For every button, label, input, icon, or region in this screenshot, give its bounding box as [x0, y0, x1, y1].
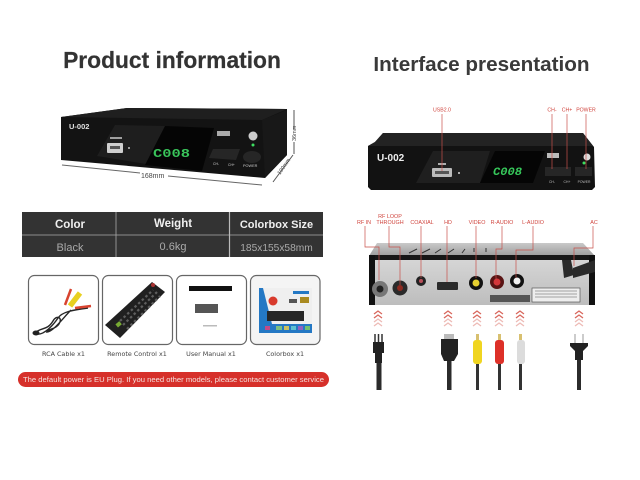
table headers: [55, 218, 313, 231]
connector: HDMI cable: [441, 334, 458, 390]
callout labels: THROUGH: [376, 220, 404, 226]
callout labels: CH-: [547, 108, 557, 114]
front panel photo with callouts: [368, 108, 596, 190]
accessory: colorbox: [250, 276, 320, 344]
front panel photo with callouts: CH+: [564, 180, 570, 184]
callout labels: RF IN: [357, 220, 371, 226]
front panel photo with callouts: CH-: [549, 180, 555, 184]
accessory: remote control: [102, 276, 172, 344]
title: product information: Product information: [63, 47, 281, 73]
accessory labels: [42, 350, 304, 358]
table headers: Color: [55, 219, 86, 231]
callout lines: [442, 114, 586, 171]
product photo: receiver with dimensions: 100mm: [277, 157, 292, 176]
table values: Black: [57, 242, 84, 254]
front panel photo with callouts: POWER: [578, 180, 591, 184]
title: interface presentation: Interface presentation: [373, 53, 590, 76]
callout labels: VIDEO: [469, 220, 485, 226]
product photo: receiver with dimensions: C008: [153, 147, 190, 161]
connector: white RCA: [517, 334, 525, 390]
notice pill: [18, 372, 329, 387]
callout labels: COAXIAL: [410, 220, 434, 226]
table values: [57, 241, 313, 254]
product photo: receiver with dimensions: CH-: [213, 162, 219, 166]
rear panel photo with callouts: [357, 214, 598, 305]
product photo: receiver with dimensions: 168mm: [141, 173, 165, 180]
connector: yellow RCA: [473, 334, 482, 390]
callout labels: HD: [444, 220, 452, 226]
accessory: RCA cable: [28, 276, 98, 344]
icons: upward chevrons: [374, 311, 583, 326]
connector: red RCA: [495, 334, 504, 390]
accessory: user manual: [176, 276, 246, 344]
callout labels: [433, 108, 596, 114]
accessory labels: User Manual x1: [186, 350, 236, 358]
callout labels: [357, 214, 598, 226]
product photo: receiver with dimensions: [61, 108, 298, 185]
product photo: receiver with dimensions: CH+: [228, 163, 235, 167]
table headers: Weight: [154, 218, 192, 230]
callout labels: POWER: [576, 108, 596, 114]
notice pill: The default power is EU Plug. If you need other models, please contact customer service: [23, 375, 324, 384]
callout labels: USB2.0: [433, 108, 451, 114]
accessory labels: Remote Control x1: [107, 350, 167, 358]
callout labels: L-AUDIO: [522, 220, 544, 226]
table values: 185x155x58mm: [240, 243, 313, 254]
table headers: Colorbox Size: [240, 219, 313, 231]
callout labels: R-AUDIO: [491, 220, 513, 226]
callout labels: RF LOOP: [378, 214, 402, 220]
front panel photo with callouts: C008: [493, 167, 522, 179]
front panel photo with callouts: U-002: [377, 153, 405, 164]
callout labels: AC: [590, 220, 598, 226]
connector: S-video cable: [373, 334, 384, 390]
accessory labels: RCA Cable x1: [42, 350, 85, 358]
product photo: receiver with dimensions: 36mm: [292, 125, 298, 141]
product photo: receiver with dimensions: POWER: [243, 164, 258, 168]
connector: EU power plug: [570, 334, 588, 390]
callout lines: [365, 226, 593, 285]
table values: 0.6kg: [160, 241, 186, 253]
product photo: receiver with dimensions: U-002: [69, 122, 89, 131]
spec table: [22, 212, 323, 257]
callout labels: CH+: [562, 108, 572, 114]
accessory labels: Colorbox x1: [266, 350, 304, 358]
